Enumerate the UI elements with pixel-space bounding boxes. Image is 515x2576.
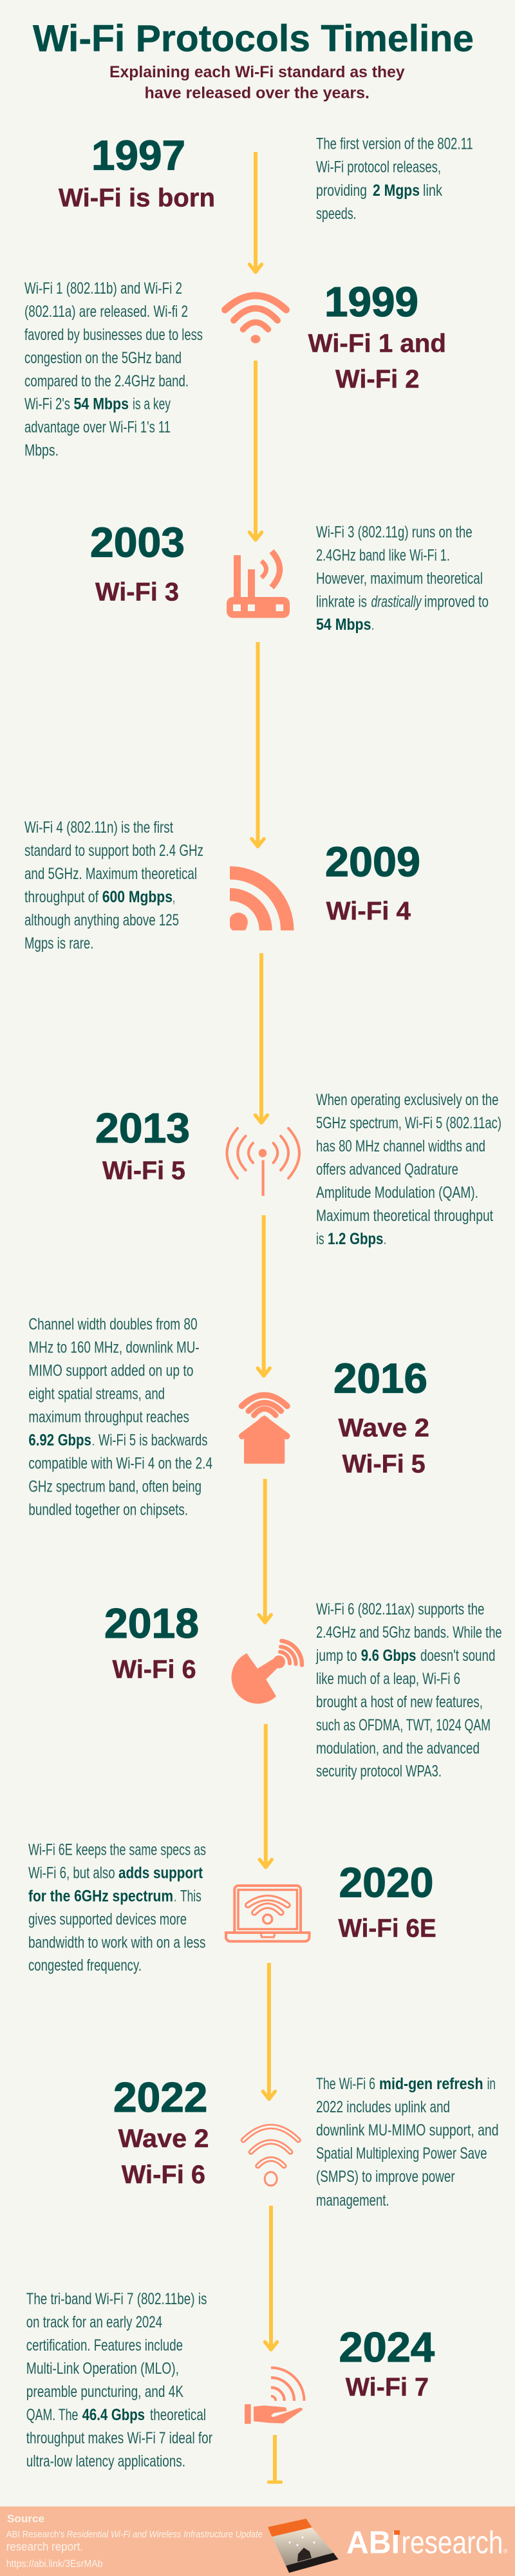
description 2009: [24, 819, 203, 952]
description 2009: ,: [173, 888, 175, 906]
description 2003: .: [371, 616, 374, 634]
description 1997: link: [423, 182, 442, 200]
description 2016: Channel width doubles from 80: [28, 1316, 198, 1334]
arrow 2003 to 2009: [252, 642, 264, 846]
description 2009: Mgps is rare.: [24, 934, 93, 952]
ABI Research logo: ®: [503, 2548, 508, 2554]
description 2018: security protocol WPA3.: [316, 1763, 442, 1781]
heading: Wave 2 Wi-Fi 5: Wi-Fi 5: [342, 1450, 426, 1479]
panel: 1999 Wi-Fi 1 and Wi-Fi 2: [24, 278, 446, 460]
description 1999: compared to the 2.4GHz band.: [24, 372, 189, 390]
description 2020: Wi-Fi 6, but also: [28, 1864, 115, 1882]
description 2009: Wi-Fi 4 (802.11n) is the first: [24, 819, 173, 837]
arrow 2020 to 2022: [263, 1963, 275, 2099]
heading: Wi-Fi 6E: Wi-Fi 6E: [339, 1914, 436, 1942]
description 2022: 2022 includes uplink and: [316, 2098, 450, 2116]
description 2022: mid-gen refresh: [379, 2075, 483, 2093]
year 2013: 2013: [95, 1104, 190, 1151]
description 2016: eight spatial streams, and: [28, 1385, 165, 1403]
icon: antenna: [227, 1128, 299, 1196]
description 2016: MIMO support added on up to: [28, 1361, 194, 1379]
arrow 2018 to 2020: [259, 1724, 272, 1868]
description 1999: favored by businesses due to less: [24, 326, 203, 344]
description 1999: Mbps.: [24, 442, 59, 460]
description 1999: congestion on the 5GHz band: [24, 349, 182, 367]
ABI Research logo: ABI: [346, 2526, 400, 2561]
description 2020: adds support: [118, 1864, 203, 1882]
panel: 2003 Wi-Fi 3: [90, 519, 489, 634]
description 1997: 2 Mgps: [373, 182, 420, 200]
description 1999: 54 Mbps: [73, 395, 129, 413]
description 2018: [315, 1600, 502, 1781]
description 2009: standard to support both 2.4 GHz: [24, 842, 203, 860]
description 2020: This: [180, 1887, 201, 1905]
year 1997: 1997: [91, 131, 185, 179]
report cover: [268, 2519, 339, 2573]
source citation: Residential Wi-Fi and Wireless Infrastructure Update: [67, 2529, 263, 2540]
heading: Wi-Fi 1 and Wi-Fi 2: Wi-Fi 1 and: [308, 330, 446, 358]
description 2024: preamble puncturing, and 4K: [26, 2383, 183, 2401]
description 2024: The tri-band Wi-Fi 7 (802.11be) is: [26, 2290, 207, 2308]
description 2013: .: [384, 1230, 386, 1248]
panel: 1997 Wi-Fi is born: [59, 131, 473, 223]
description 2018: like much of a leap, Wi-Fi 6: [316, 1670, 460, 1688]
heading: Wi-Fi 1 and Wi-Fi 2: Wi-Fi 2: [335, 365, 420, 393]
year 2018: 2018: [104, 1600, 199, 1647]
description 2024: QAM. The: [26, 2406, 78, 2424]
icon: hand with signal: [245, 2367, 304, 2424]
arrow 2013 to 2016: [258, 1215, 270, 1376]
description 2009: and 5GHz. Maximum theoretical: [24, 865, 197, 883]
description 2022: in: [487, 2075, 496, 2093]
source citation: ABI Research's: [6, 2529, 65, 2540]
year 2022: 2022: [113, 2074, 207, 2121]
description 2003: 54 Mbps: [316, 616, 371, 634]
description 2016: maximum throughput reaches: [28, 1408, 189, 1426]
panel: 2020 Wi-Fi 6E: [28, 1841, 436, 1975]
source citation: research report.: [6, 2541, 83, 2553]
description 2013: [316, 1091, 501, 1248]
panel: 2016 Wave 2 Wi-Fi 5: [28, 1316, 429, 1519]
description 2020: .: [174, 1887, 176, 1905]
description 2020: for the 6GHz spectrum: [28, 1887, 173, 1905]
icon: satellite dish: [232, 1641, 302, 1704]
heading: Wave 2 Wi-Fi 5: [339, 1414, 429, 1479]
heading: Wi-Fi 6: Wi-Fi 6: [112, 1656, 196, 1684]
title: Wi-Fi Protocols Timeline: [33, 18, 474, 59]
description 1999: Wi-Fi 2's: [24, 395, 70, 413]
year 2024: 2024: [339, 2324, 435, 2371]
arrow 1999 to 2003: [250, 361, 261, 540]
description 2022: [316, 2075, 498, 2210]
year 2009: 2009: [325, 838, 420, 885]
description 1997: speeds.: [316, 205, 357, 223]
icon: wifi outline: [243, 2126, 299, 2186]
description 2018: 9.6 Gbps: [361, 1647, 416, 1665]
description 2016: compatible with Wi-Fi 4 on the 2.4: [28, 1454, 212, 1472]
timeline end stop: [267, 2435, 283, 2484]
subtitle: [109, 63, 405, 102]
description 2016: 6.92 Gbps: [28, 1431, 91, 1449]
description 2024: theoretical: [150, 2406, 206, 2424]
description 2024: certification. Features include: [26, 2336, 183, 2354]
panel: 2018 Wi-Fi 6: [104, 1600, 502, 1781]
panel: 2024 Wi-Fi 7: [26, 2290, 435, 2470]
description 2020: Wi-Fi 6E keeps the same specs as: [28, 1841, 206, 1859]
description 1997: Wi-Fi protocol releases,: [316, 158, 441, 176]
ABI Research logo: [346, 2526, 508, 2561]
heading: Wi-Fi is born: Wi-Fi is born: [59, 184, 215, 213]
description 1997: providing: [316, 182, 367, 200]
arrow 2016 to 2018: [259, 1479, 271, 1623]
icon: laptop with wifi: [226, 1886, 309, 1941]
description 2016: Wi-Fi 5 is backwards: [98, 1431, 207, 1449]
description 2016: MHz to 160 MHz, downlink MU-: [28, 1339, 200, 1357]
heading: Wi-Fi 7: Wi-Fi 7: [346, 2373, 429, 2401]
description 2024: ultra-low latency applications.: [26, 2452, 185, 2470]
panel: source footer: [0, 2506, 515, 2576]
heading: Wave 2 Wi-Fi 5: Wave 2: [339, 1414, 429, 1443]
heading: Wave 2 Wi-Fi 6: [118, 2125, 209, 2189]
description 2003: drastically: [371, 592, 422, 611]
heading: Wi-Fi 5: Wi-Fi 5: [102, 1157, 185, 1185]
description 2022: management.: [316, 2192, 389, 2210]
description 2016: .: [92, 1431, 95, 1449]
year 2020: 2020: [339, 1859, 434, 1906]
heading: Wave 2 Wi-Fi 6: Wi-Fi 6: [122, 2161, 205, 2189]
description 1999: Wi-Fi 1 (802.11b) and Wi-Fi 2: [24, 279, 182, 298]
description 2024: Multi-Link Operation (MLO),: [26, 2360, 179, 2378]
description 2003: linkrate is: [316, 592, 367, 611]
description 2020: [28, 1841, 206, 1975]
subtitle: Explaining each Wi-Fi standard as they: [109, 63, 405, 81]
icon: wifi solid: [225, 296, 286, 343]
arrow 2022 to 2024: [265, 2206, 277, 2349]
description 2003: improved to: [424, 592, 489, 611]
description 2009: although anything above 125: [24, 911, 179, 929]
description 2016: bundled together on chipsets.: [28, 1501, 188, 1519]
description 2022: (SMPS) to improve power: [316, 2168, 455, 2186]
arrow 2009 to 2013: [255, 953, 268, 1123]
description 2003: [316, 523, 489, 634]
description 2024: throughput makes Wi-Fi 7 ideal for: [26, 2429, 212, 2447]
source citation: https://abi.link/3EsrMAb: [6, 2559, 103, 2570]
heading: Wi-Fi 4: Wi-Fi 4: [326, 897, 411, 925]
source citation: [6, 2529, 263, 2570]
description 2018: jump to: [315, 1647, 357, 1665]
subtitle: have released over the years.: [144, 84, 370, 102]
description 1999: is a key: [133, 395, 171, 413]
description 2024: on track for an early 2024: [26, 2313, 162, 2331]
description 2009: 600 Mgbps: [102, 888, 173, 906]
description 2024: 46.4 Gbps: [82, 2406, 145, 2424]
icon: wifi house: [242, 1395, 287, 1464]
heading: Wi-Fi 3: Wi-Fi 3: [95, 578, 179, 607]
panel: 2013 Wi-Fi 5: [95, 1091, 501, 1248]
description 2013: 1.2 Gbps: [328, 1230, 383, 1248]
description 2020: congested frequency.: [28, 1956, 142, 1975]
description 2020: bandwidth to work with on a less: [28, 1933, 205, 1951]
description 2013: is: [316, 1230, 324, 1248]
description 2013: offers advanced Qadrature: [316, 1160, 458, 1179]
description 1999: [24, 279, 203, 460]
source heading: Source: [7, 2513, 44, 2525]
heading: Wi-Fi 1 and Wi-Fi 2: [308, 330, 446, 393]
description 2016: GHz spectrum band, often being: [28, 1477, 201, 1495]
description 1997: [316, 135, 473, 223]
icon: broadcast signal: [230, 873, 287, 931]
description 2016: [28, 1316, 212, 1519]
description 1999: advantage over Wi-Fi 1's 11: [24, 419, 171, 437]
year 2003: 2003: [90, 519, 185, 566]
icon: router: [227, 551, 290, 618]
description 2003: 2.4GHz band like Wi-Fi 1.: [316, 546, 450, 564]
year 2016: 2016: [333, 1355, 427, 1402]
description 2022: The Wi-Fi 6: [316, 2075, 375, 2093]
heading: Wave 2 Wi-Fi 6: Wave 2: [118, 2125, 209, 2153]
panel: 2022 Wave 2 Wi-Fi 6: [113, 2074, 498, 2210]
description 1999: (802.11a) are released. Wi-fi 2: [24, 303, 188, 321]
arrow 1997 to 1999: [250, 152, 261, 272]
description 2009: throughput of: [24, 888, 98, 906]
description 2024: [26, 2290, 212, 2470]
description 2020: gives supported devices more: [28, 1910, 187, 1928]
panel: 2009 Wi-Fi 4: [24, 819, 420, 952]
year 1999: 1999: [324, 278, 418, 325]
